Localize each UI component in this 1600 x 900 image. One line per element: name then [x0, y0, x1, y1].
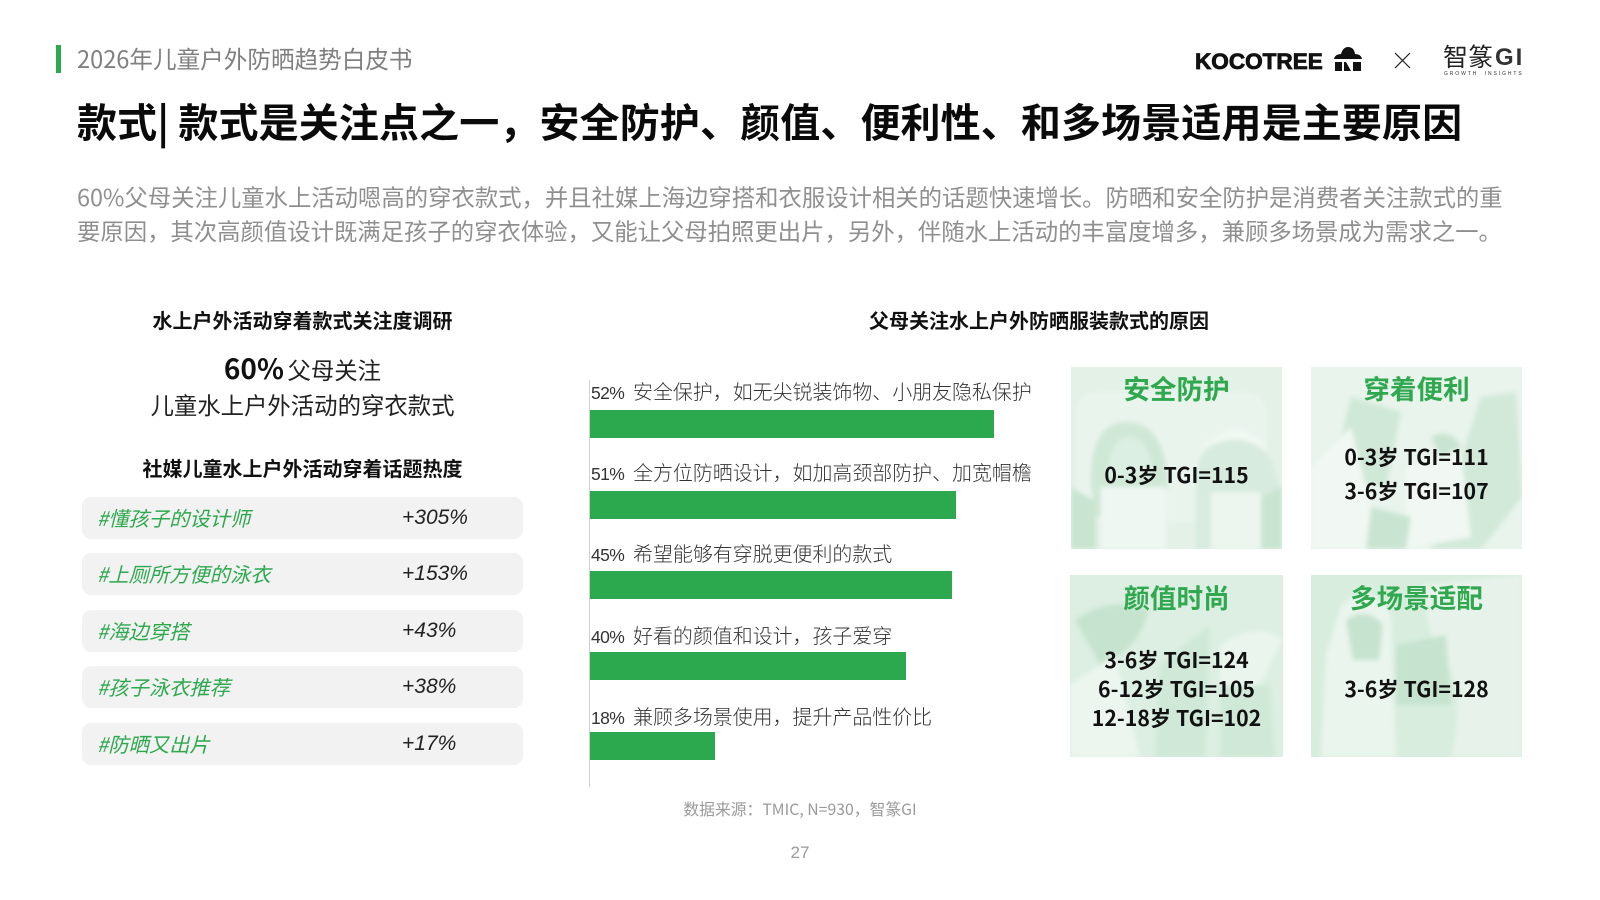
logo separator: cross — [1394, 52, 1410, 68]
bar 3 — [590, 571, 952, 599]
report title: 2026年儿童户外防晒趋势白皮书 — [77, 41, 413, 75]
summary paragraph: 60%父母关注儿童水上活动嗯高的穿衣款式，并且社媒上海边穿搭和衣服设计相关的话题快速增长。防晒和安全防护是消费者关注款式的重 — [77, 179, 1503, 213]
topic row 5: #防晒又出片 — [97, 728, 210, 758]
bar label 3: 希望能够有穿脱更便利的款式 — [633, 538, 892, 567]
topic row 1: +305% — [402, 506, 468, 529]
topic row 1: #懂孩子的设计师 — [97, 502, 250, 532]
topic row 3: #海边穿搭 — [97, 615, 189, 645]
card: ease of wearing — [1311, 367, 1522, 549]
card: looks and style: 3-6岁 TGI=124 — [1104, 644, 1249, 675]
card: looks and style: 颜值时尚 — [1123, 577, 1230, 616]
topics heading: 社媒儿童水上户外活动穿着话题热度 — [142, 453, 462, 482]
logo: growth insights: GI — [1495, 44, 1524, 71]
card: ease of wearing: 3-6岁 TGI=107 — [1344, 475, 1489, 506]
logo: growth insights: GROWTH INSIGHTS — [1444, 71, 1524, 77]
summary paragraph — [77, 179, 1503, 247]
summary paragraph: 要原因，其次高颜值设计既满足孩子的穿衣体验，又能让父母拍照更出片，另外，伴随水上活动的丰富度增多，兼顾多场景成为需求之一。 — [77, 213, 1502, 247]
card: safety protection — [1071, 367, 1282, 549]
bar label 4: 好看的颜值和设计，孩子爱穿 — [633, 620, 892, 649]
bar label 5: 18% — [591, 708, 624, 728]
bar 4 — [590, 652, 906, 680]
card: looks and style — [1070, 575, 1283, 757]
logo: KOCOTREE: KOCOTREE — [1195, 49, 1323, 74]
topic row 2: #上厕所方便的泳衣 — [97, 558, 271, 588]
survey result — [150, 348, 455, 421]
main heading: 款式| 款式是关注点之一，安全防护、颜值、便利性、和多场景适用是主要原因 — [77, 91, 1462, 149]
topic row 1 — [82, 497, 523, 539]
card: ease of wearing: 穿着便利 — [1363, 368, 1470, 407]
bar label 5: 兼顾多场景使用，提升产品性价比 — [633, 701, 932, 730]
bar label 1: 安全保护，如无尖锐装饰物、小朋友隐私保护 — [633, 376, 1032, 405]
card: ease of wearing: 0-3岁 TGI=111 — [1344, 441, 1489, 472]
card: safety protection: 0-3岁 TGI=115 — [1104, 459, 1249, 490]
panel: survey and social topics — [142, 305, 462, 482]
bar 2 — [590, 491, 956, 519]
survey heading: 水上户外活动穿着款式关注度调研 — [152, 305, 452, 334]
card: multi-scene: 3-6岁 TGI=128 — [1344, 673, 1489, 704]
bar label 4: 40% — [591, 627, 624, 647]
topic row 3 — [82, 610, 523, 652]
bar label 2: 全方位防晒设计，如加高颈部防护、加宽帽檐 — [633, 457, 1032, 486]
topic row 5 — [82, 723, 523, 765]
data source: 数据来源：TMIC, N=930，智篆GI — [683, 797, 917, 820]
card: multi-scene: 多场景适配 — [1350, 577, 1483, 616]
card: looks and style: 12-18岁 TGI=102 — [1092, 702, 1261, 733]
page number: 27 — [791, 843, 809, 862]
survey result: 60% 父母关注 — [224, 348, 381, 388]
card: looks and style: 6-12岁 TGI=105 — [1098, 673, 1255, 704]
topic row 5: +17% — [402, 732, 456, 755]
bar chart: axis — [589, 380, 590, 787]
topic row 2: +153% — [402, 562, 468, 585]
logo: growth insights — [1443, 38, 1524, 77]
chart heading: 父母关注水上户外防晒服装款式的原因 — [869, 305, 1209, 334]
bar label 3: 45% — [591, 545, 624, 565]
topic row 4: #孩子泳衣推荐 — [97, 671, 230, 701]
bar 5 — [590, 732, 715, 760]
accent bar — [56, 45, 61, 73]
bar 1 — [590, 410, 994, 438]
topic row 4: +38% — [402, 675, 456, 698]
bar label 1: 52% — [591, 383, 624, 403]
topic row 4 — [82, 666, 523, 708]
bar label 2: 51% — [591, 464, 624, 484]
card: safety protection: 安全防护 — [1123, 368, 1230, 407]
survey result: 儿童水上户外活动的穿衣款式 — [150, 387, 455, 421]
topic row 2 — [82, 553, 523, 595]
logo: growth insights: 智篆 — [1443, 38, 1493, 74]
card: multi-scene — [1311, 575, 1522, 757]
topic row 3: +43% — [402, 619, 456, 642]
